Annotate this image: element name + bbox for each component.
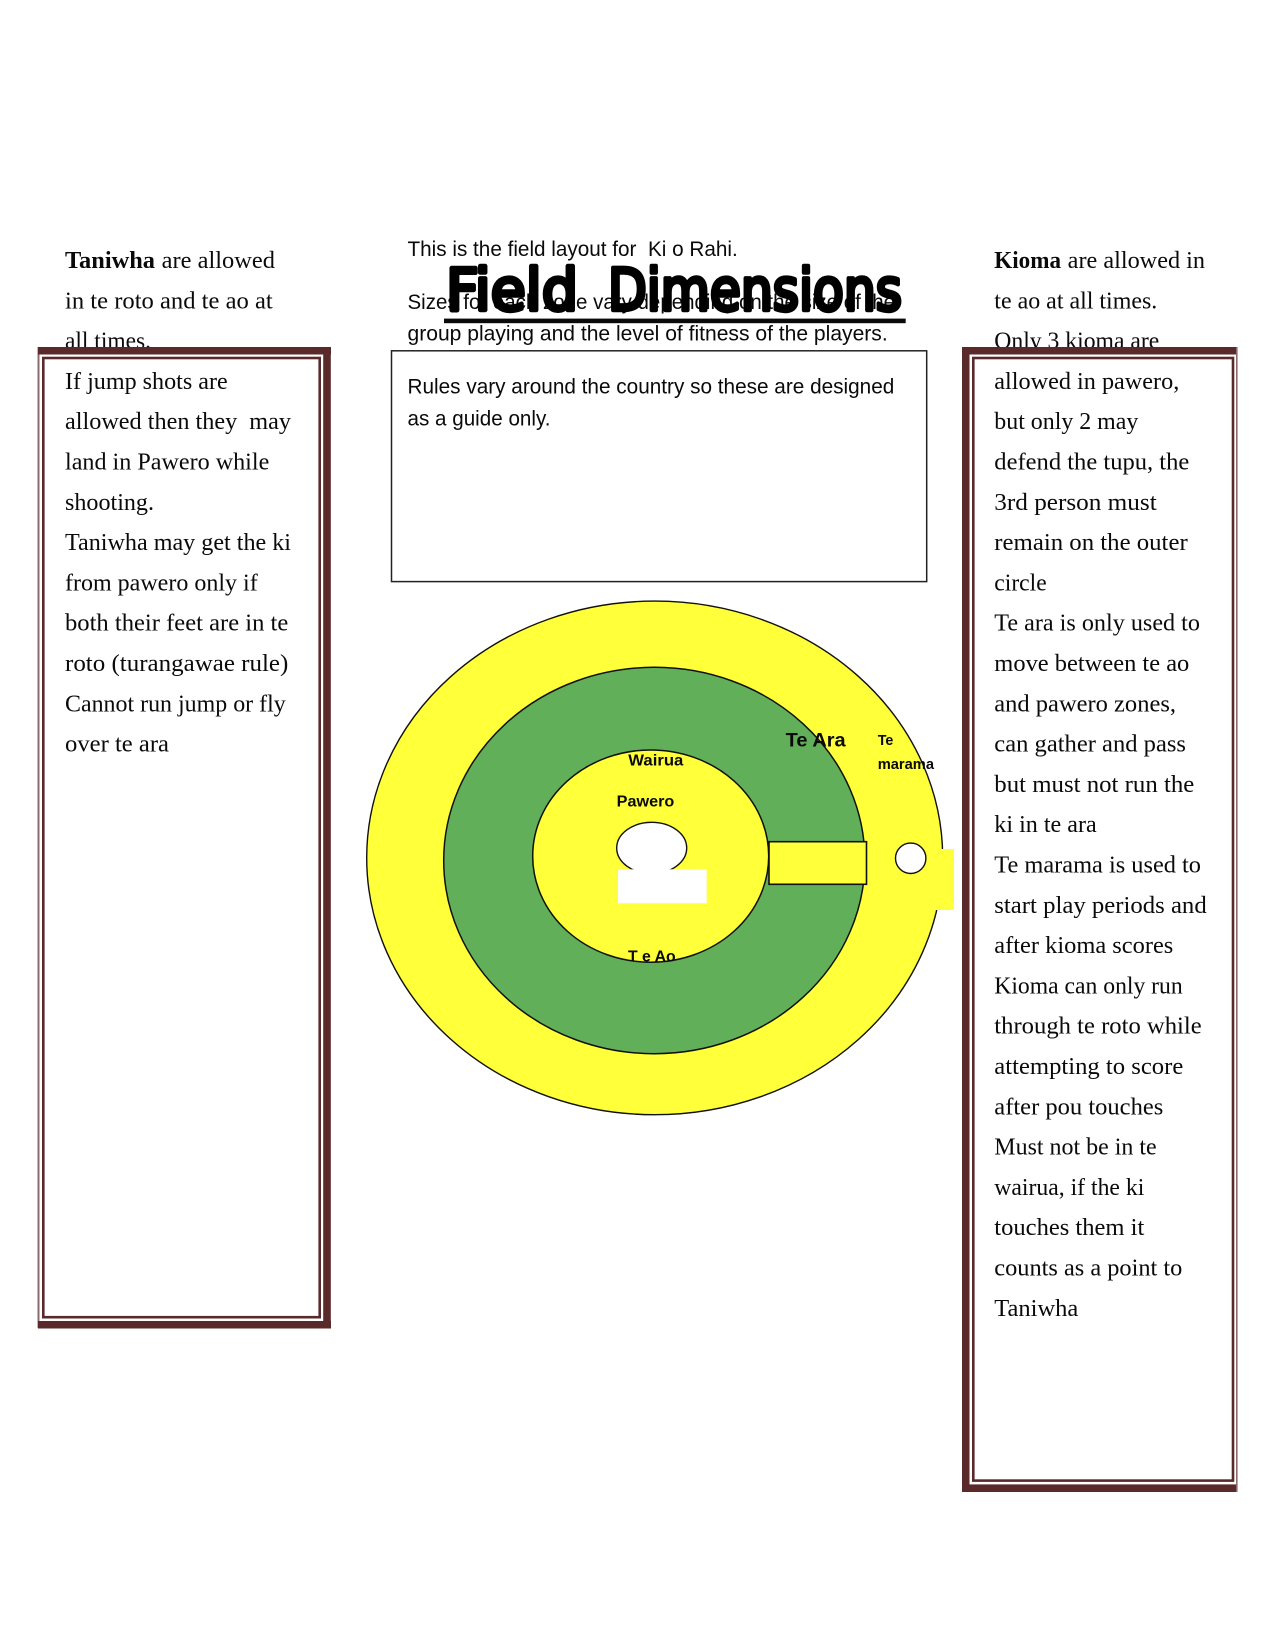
text block: Kioma rules: but must not run the [994, 772, 1194, 798]
text block: Kioma rules: start play periods and [994, 893, 1207, 919]
text block: Kioma rules: and pawero zones, [994, 691, 1176, 717]
text block: Kioma rules: after kioma scores [994, 933, 1173, 959]
text block: Kioma rules: allowed in pawero, [994, 369, 1179, 395]
zone: te ao outer ring [367, 601, 943, 1115]
label: Te marama: marama [878, 756, 935, 773]
text block: Kioma rules: counts as a point to [994, 1256, 1182, 1282]
text block: field layout intro: group playing and the level of fitness of the players. [408, 322, 888, 346]
text block: field layout intro [408, 237, 895, 346]
text block: Taniwha rules: allowed then they may [65, 409, 291, 435]
text block: Kioma rules: Taniwha [994, 1296, 1079, 1322]
text block: Kioma rules: through te roto while [994, 1014, 1202, 1040]
callout: rules vary box [392, 351, 927, 582]
text block: Taniwha rules: from pawero only if [65, 570, 258, 596]
text block: Taniwha rules: If jump shots are [65, 369, 228, 395]
label: Te Ao: T e Ao [628, 949, 676, 966]
text block: Kioma rules: are allowed in [1068, 248, 1205, 274]
text block: Kioma rules: ki in te ara [994, 812, 1097, 838]
white patch over centre [618, 869, 707, 903]
text block: field layout intro: Sizes for each zone vary depending on the size of the [408, 290, 895, 314]
text block: Kioma rules: after pou touches [994, 1094, 1163, 1120]
text block: Taniwha rules [65, 248, 291, 758]
label: Te marama [878, 732, 935, 773]
text block: Kioma rules: Must not be in te [994, 1135, 1157, 1161]
text block: Taniwha rules: Taniwha [65, 248, 155, 274]
heading: Field Dimensions title: Field [446, 256, 578, 324]
label: Te marama: Te [878, 732, 893, 749]
zone: tupu centre [617, 822, 687, 874]
heading: Field Dimensions title [444, 256, 906, 324]
text block: Kioma rules: Te ara is only used to [994, 611, 1200, 637]
text block: Taniwha rules: roto (turangawae rule) [65, 651, 288, 677]
panel: right border frame [962, 347, 1238, 1492]
zone: te marama circle [896, 843, 926, 874]
text block: Taniwha rules: in te roto and te ao at [65, 288, 273, 314]
text block: Taniwha rules: over te ara [65, 732, 169, 758]
text block: Kioma rules: circle [994, 570, 1047, 596]
text block: Kioma rules: Te marama is used to [994, 852, 1201, 878]
text block: Taniwha rules: Taniwha may get the ki [65, 530, 291, 556]
label: Te Ara: Te Ara [786, 730, 846, 752]
text block: Kioma rules [994, 248, 1207, 1322]
text block: Taniwha rules: are allowed [162, 248, 275, 274]
text block: Kioma rules: Only 3 kioma are [994, 329, 1159, 355]
text block: Kioma rules: but only 2 may [994, 409, 1138, 435]
text block: Taniwha rules: both their feet are in te [65, 611, 288, 637]
text block: Kioma rules: defend the tupu, the [994, 450, 1189, 476]
text block: Taniwha rules: Cannot run jump or fly [65, 691, 286, 717]
text block: Taniwha rules: land in Pawero while [65, 450, 269, 476]
callout: rules vary box: Rules vary around the country so these are designed [408, 374, 894, 398]
yellow tab on outer ring [925, 849, 954, 910]
zone: te roto green ring [444, 667, 865, 1054]
text block: Kioma rules: wairua, if the ki [994, 1175, 1145, 1201]
text block: Kioma rules: move between te ao [994, 651, 1189, 677]
text block: Kioma rules: te ao at all times. [994, 288, 1157, 314]
panel: left border frame [38, 347, 331, 1328]
text block: Kioma rules: remain on the outer [994, 530, 1188, 556]
callout: rules vary box: as a guide only. [408, 407, 550, 431]
text block: Kioma rules: attempting to score [994, 1054, 1183, 1080]
label: Wairua: Wairua [628, 753, 683, 770]
text block: Taniwha rules: all times. [65, 329, 151, 355]
text block: Kioma rules: Kioma can only run [994, 973, 1183, 999]
text block: Kioma rules: 3rd person must [994, 490, 1157, 516]
text block: Kioma rules: Kioma [994, 248, 1061, 274]
text block: Kioma rules: can gather and pass [994, 732, 1186, 758]
text block: field layout intro: This is the field layout for Ki o Rahi. [408, 237, 738, 261]
chart: concentric field diagram [367, 601, 954, 1115]
zone: pawero inner circle [533, 750, 769, 962]
text block: Kioma rules: touches them it [994, 1215, 1145, 1241]
text block: Taniwha rules: shooting. [65, 490, 154, 516]
label: Pawero: Pawero [617, 794, 675, 811]
zone: te ara rectangle [769, 842, 866, 884]
heading: Field Dimensions title: Dimensions [608, 256, 902, 324]
